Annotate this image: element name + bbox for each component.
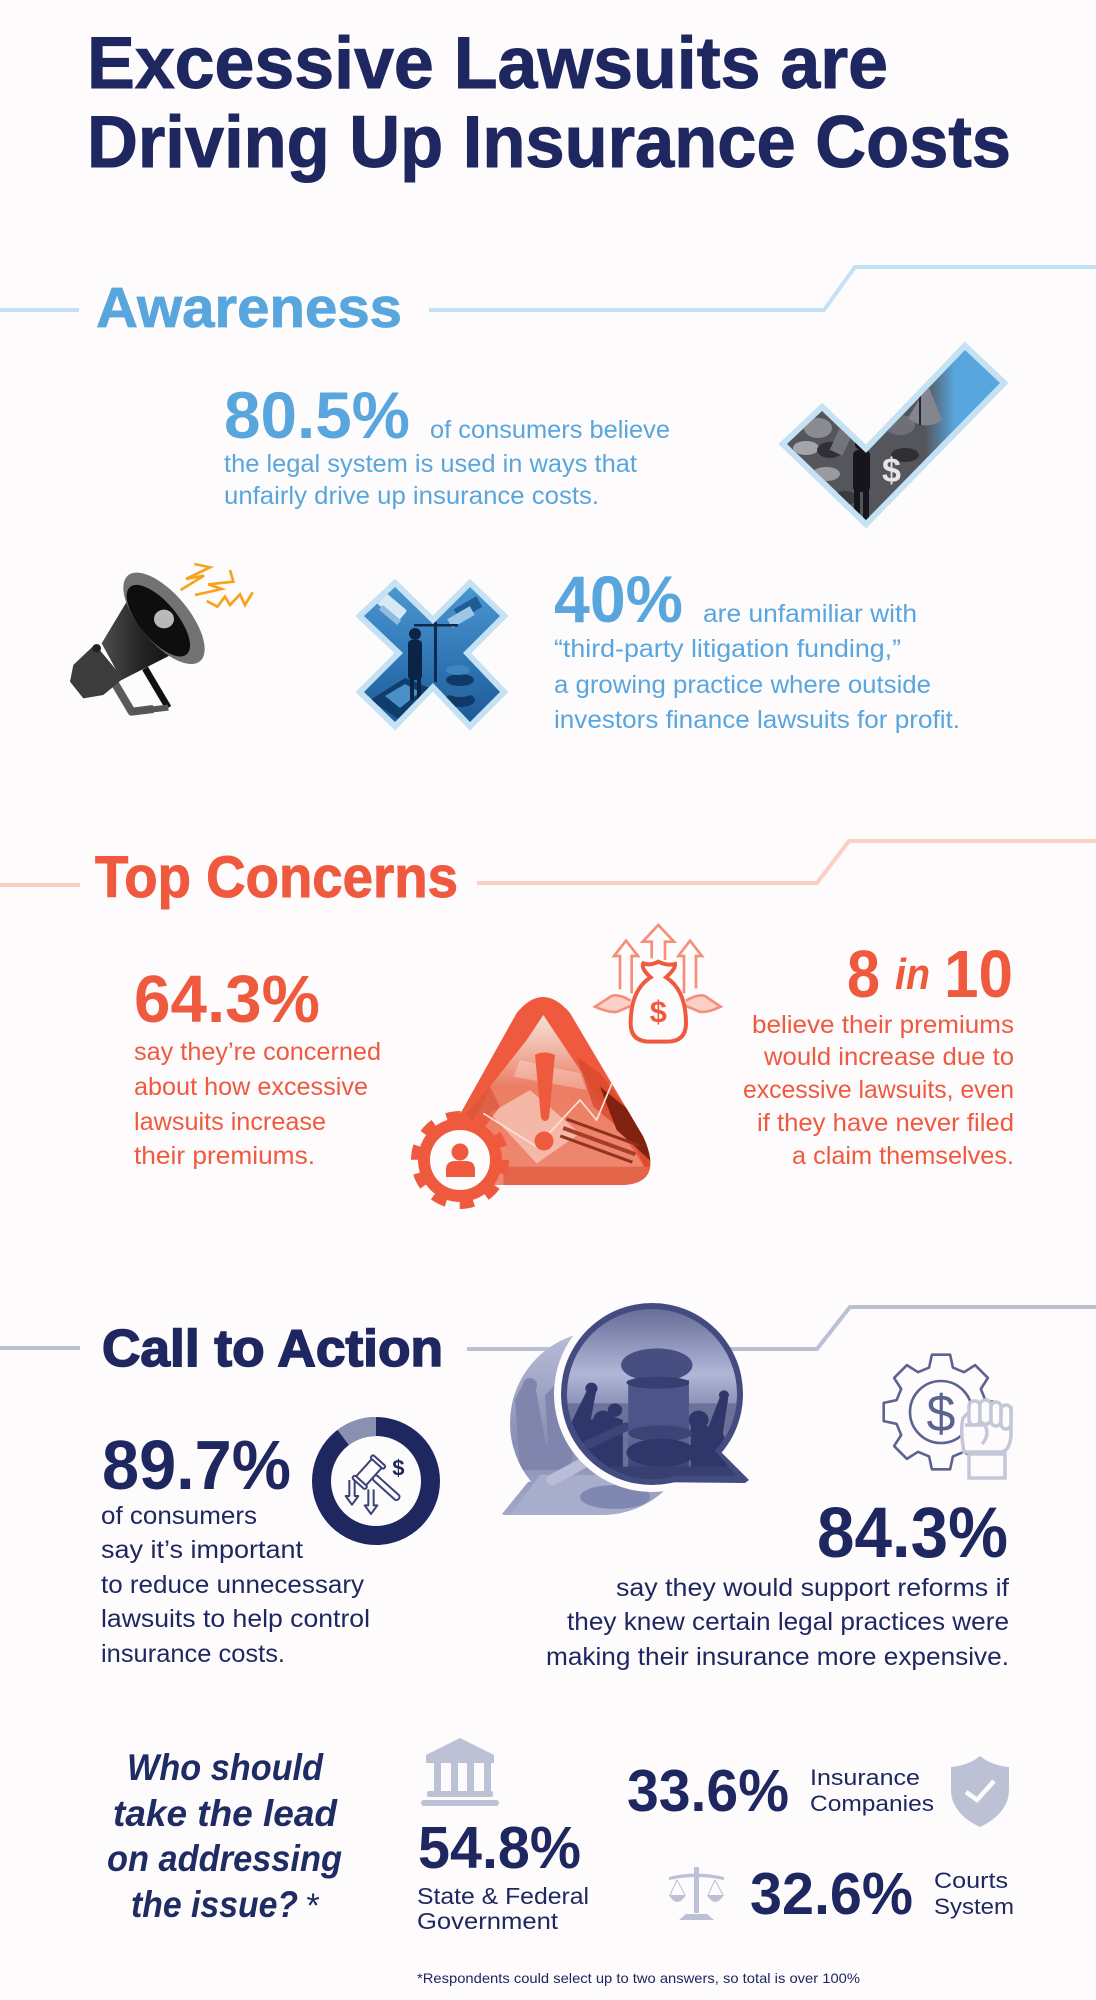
stat: 33.6% insurance companies: Insurance bbox=[810, 1765, 920, 1790]
stat: 89.7% of consumers: of consumers bbox=[101, 1502, 257, 1530]
stat: 64.3% concerned: say they’re concerned bbox=[134, 1038, 381, 1066]
title bbox=[87, 23, 1011, 183]
section header: Call to Action bbox=[0, 1307, 1096, 1378]
heading: who should take the lead: Who should bbox=[127, 1747, 324, 1788]
stat: 84.3% support reforms: making their insurance more expensive. bbox=[546, 1643, 1009, 1671]
section header: Awareness bbox=[0, 267, 1096, 340]
icon: gear with dollar and fist: $ bbox=[927, 1385, 956, 1443]
icon: warning triangle bbox=[460, 997, 650, 1185]
stat: 33.6% insurance companies bbox=[627, 1758, 934, 1824]
icon: flying money bag bbox=[595, 925, 721, 1042]
stat: 8 in 10: 10 bbox=[944, 937, 1013, 1012]
icon: front speech bubble with gavel bbox=[560, 1303, 750, 1485]
stat: 80.5% of consumers: unfairly drive up insurance costs. bbox=[224, 482, 599, 510]
stat: 33.6% insurance companies: 33.6% bbox=[627, 1758, 789, 1824]
stat: 54.8% government: Government bbox=[417, 1908, 559, 1934]
stat: 84.3% support reforms bbox=[546, 1494, 1009, 1671]
stat: 89.7% of consumers: insurance costs. bbox=[101, 1640, 285, 1668]
title: Excessive Lawsuits are bbox=[87, 23, 888, 104]
stat: 40% unfamiliar: a growing practice where outside bbox=[554, 671, 931, 699]
stat: 80.5% of consumers: 80.5% bbox=[224, 378, 410, 452]
stat: 54.8% government: 54.8% bbox=[418, 1815, 581, 1881]
heading: who should take the lead: on addressing bbox=[107, 1838, 342, 1879]
stat: 32.6% courts system: 32.6% bbox=[750, 1861, 913, 1927]
section header: Top Concerns bbox=[0, 841, 1096, 910]
stat: 89.7% of consumers: lawsuits to help control bbox=[101, 1605, 370, 1633]
icon: scales of justice bbox=[669, 1867, 724, 1920]
section header: Call to Action: Call to Action bbox=[102, 1320, 443, 1378]
chart: donut 89.7% bbox=[322, 1426, 430, 1536]
stat: 84.3% support reforms: they knew certain legal practices were bbox=[567, 1608, 1009, 1636]
stat: 8 in 10: a claim themselves. bbox=[792, 1142, 1014, 1170]
stat: 40% unfamiliar: “third-party litigation funding,” bbox=[554, 635, 901, 663]
stat: 64.3% concerned: about how excessive bbox=[134, 1073, 368, 1101]
stat: 89.7% of consumers: to reduce unnecessary bbox=[101, 1571, 365, 1599]
icon: photo check mark bbox=[780, 340, 1010, 530]
stat: 40% unfamiliar: are unfamiliar with bbox=[703, 600, 917, 628]
stat: 8 in 10: 8 bbox=[847, 937, 880, 1012]
stat: 32.6% courts system bbox=[750, 1861, 1014, 1927]
icon: government building bbox=[421, 1738, 499, 1806]
stat: 32.6% courts system: System bbox=[934, 1894, 1014, 1919]
title: Driving Up Insurance Costs bbox=[87, 102, 1011, 183]
icon: photo X mark bbox=[355, 576, 511, 732]
stat: 64.3% concerned: their premiums. bbox=[134, 1142, 315, 1170]
footnote: *Respondents could select up to two answers, so total is over 100% bbox=[417, 1970, 860, 1986]
stat: 64.3% concerned bbox=[134, 962, 381, 1170]
stat: 84.3% support reforms: say they would support reforms if bbox=[616, 1574, 1009, 1602]
stat: 40% unfamiliar bbox=[554, 562, 960, 734]
icon: gear with dollar and fist bbox=[884, 1355, 1011, 1478]
stat: 8 in 10: believe their premiums bbox=[752, 1011, 1014, 1039]
heading: who should take the lead bbox=[107, 1747, 342, 1925]
stat: 8 in 10: would increase due to bbox=[763, 1043, 1014, 1071]
stat: 84.3% support reforms: 84.3% bbox=[817, 1494, 1008, 1573]
stat: 8 in 10 bbox=[743, 937, 1014, 1170]
stat: 32.6% courts system: Courts bbox=[934, 1868, 1008, 1893]
stat: 8 in 10: excessive lawsuits, even bbox=[743, 1076, 1014, 1104]
icon: megaphone bbox=[70, 560, 219, 712]
stat: 89.7% of consumers: say it’s important bbox=[101, 1536, 303, 1564]
section header: Top Concerns: Top Concerns bbox=[95, 845, 458, 910]
heading: who should take the lead: the issue? bbox=[131, 1884, 298, 1925]
stat: 80.5% of consumers: the legal system is used in ways that bbox=[224, 450, 637, 478]
stat: 54.8% government bbox=[417, 1815, 589, 1934]
icon: shield check bbox=[951, 1756, 1009, 1827]
stat: 80.5% of consumers: of consumers believe bbox=[430, 416, 670, 444]
stat: 80.5% of consumers bbox=[224, 378, 670, 510]
icon: photo check mark: $ bbox=[882, 452, 901, 490]
stat: 40% unfamiliar: investors finance lawsuits for profit. bbox=[554, 706, 960, 734]
heading: who should take the lead: * bbox=[305, 1887, 320, 1925]
heading: who should take the lead: take the lead bbox=[113, 1793, 338, 1834]
icon: sound bolts bbox=[181, 564, 253, 607]
stat: 54.8% government: State & Federal bbox=[417, 1883, 589, 1909]
stat: 33.6% insurance companies: Companies bbox=[810, 1791, 934, 1816]
icon: gavel and arrows: $ bbox=[392, 1455, 404, 1480]
stat: 89.7% of consumers bbox=[101, 1426, 370, 1668]
stat: 64.3% concerned: 64.3% bbox=[134, 962, 320, 1037]
stat: 64.3% concerned: lawsuits increase bbox=[134, 1108, 326, 1136]
stat: 8 in 10: if they have never filed bbox=[757, 1109, 1014, 1137]
stat: 89.7% of consumers: 89.7% bbox=[102, 1426, 291, 1504]
icon: gear with person bbox=[416, 1116, 504, 1204]
icon: back speech bubble with crowd bbox=[502, 1336, 664, 1515]
stat: 40% unfamiliar: 40% bbox=[554, 562, 683, 636]
icon: flying money bag: $ bbox=[650, 995, 667, 1029]
stat: 8 in 10: in bbox=[895, 950, 930, 999]
section header: Awareness: Awareness bbox=[96, 276, 402, 340]
